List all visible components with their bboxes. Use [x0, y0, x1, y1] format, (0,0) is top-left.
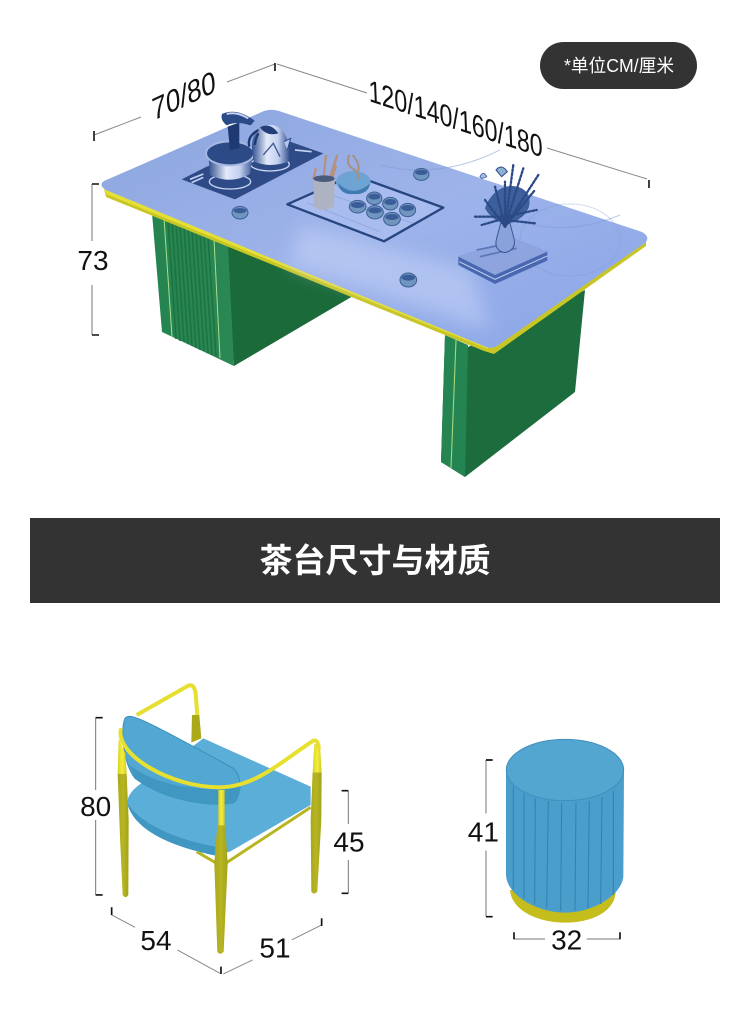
unit badge: *单位CM/厘米 — [564, 56, 674, 76]
dimension: seat height 45 — [333, 791, 365, 893]
banner — [30, 518, 720, 603]
dimension: chair depth 54 — [112, 907, 221, 974]
backrest — [123, 716, 240, 804]
teapot — [336, 171, 371, 193]
dimension: table height 73 — [77, 184, 109, 335]
backrest lower band — [129, 765, 241, 804]
banner title: 茶台尺寸与材质 — [260, 534, 490, 582]
dimension: chair height 80 — [80, 718, 111, 895]
tray outline — [287, 175, 443, 241]
back arm tube — [137, 685, 197, 715]
dimension: table length 120/140/160/180 — [277, 64, 649, 188]
dimension: chair depth 54: 54 — [140, 925, 172, 956]
unit badge — [540, 42, 697, 89]
front centre leg — [214, 825, 228, 954]
under frame — [197, 807, 311, 863]
dimension: chair width 51 — [223, 918, 322, 974]
far left leg — [118, 774, 129, 897]
left leg front — [152, 213, 234, 366]
dimension: table depth 70/80 — [94, 63, 275, 141]
stool top — [506, 739, 624, 801]
brush cup — [313, 155, 337, 180]
front arm tube — [120, 730, 319, 787]
dimension: stool height 41: 41 — [468, 817, 499, 848]
tea tray set — [287, 155, 443, 241]
dimension: table length 120/140/160/180: 120/140/160/180 — [368, 73, 543, 165]
dimension: table height 73: 73 — [77, 245, 109, 276]
books and flower vase — [458, 165, 547, 284]
pleats — [513, 787, 613, 911]
dimension: chair height 80: 80 — [80, 791, 111, 822]
table edge — [104, 189, 646, 354]
tea cups — [232, 168, 429, 287]
gold base — [510, 890, 616, 923]
kettle — [252, 125, 289, 165]
stool — [468, 739, 624, 955]
dimension: stool width 32 — [514, 924, 620, 955]
right leg — [311, 772, 322, 893]
chair — [80, 685, 365, 974]
seat cushion — [127, 738, 311, 855]
table top — [101, 110, 647, 348]
pot — [208, 152, 253, 180]
tea kettle set — [182, 112, 323, 199]
left leg side — [226, 244, 353, 366]
dimension: stool width 32: 32 — [551, 924, 582, 955]
stool body — [506, 739, 624, 913]
dimension: table depth 70/80: 70/80 — [150, 63, 217, 128]
reflections — [290, 150, 620, 330]
dimension: stool height 41 — [468, 760, 499, 917]
induction base — [182, 142, 323, 199]
right leg — [441, 290, 585, 477]
dimension: seat height 45: 45 — [333, 827, 365, 858]
tap — [228, 123, 239, 150]
dimension: chair width 51: 51 — [259, 932, 291, 963]
tea table — [101, 110, 647, 477]
back leg upper — [191, 715, 201, 743]
